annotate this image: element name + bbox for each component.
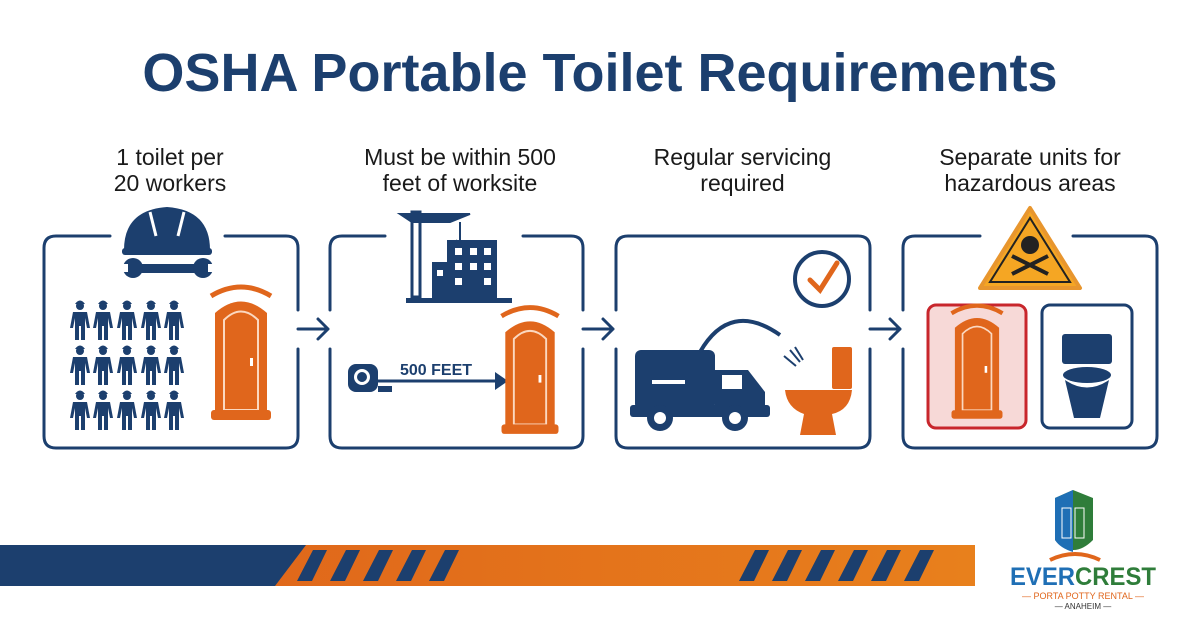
logo (1010, 490, 1156, 611)
icon: porta potty 2 (502, 308, 558, 434)
icon: porta potty 1 (211, 287, 271, 420)
icon: blue-boxed toilet (1042, 305, 1132, 428)
title: OSHA Portable Toilet Requirements (142, 43, 1058, 103)
icon: hard hat and wrench (118, 207, 218, 278)
icon: crane and building (400, 212, 512, 303)
footer stripe bar (0, 545, 975, 586)
label: panel 3: required (700, 170, 785, 196)
logo: — PORTA POTTY RENTAL — (1022, 591, 1144, 601)
arrow 1 (298, 319, 328, 339)
label: panel 1 (114, 144, 226, 196)
icon: hazard triangle (980, 208, 1080, 288)
label: panel 1: 20 workers (114, 170, 226, 196)
label: panel 2: Must be within 500 (364, 144, 556, 170)
icon: tape measure with 500 FEET: 500 FEET (400, 362, 472, 379)
label: panel 1: 1 toilet per (116, 144, 224, 170)
label: panel 2: feet of worksite (383, 170, 537, 196)
icon: red-boxed porta potty (928, 305, 1026, 428)
label: panel 4: hazardous areas (944, 170, 1116, 196)
panel 4 border (903, 236, 1157, 448)
label: panel 3: Regular servicing (654, 144, 831, 170)
icon: service truck (630, 321, 780, 431)
label: panel 2 (364, 144, 556, 196)
panel 3 border (616, 236, 870, 448)
arrow 3 (870, 319, 900, 339)
logo: EVERCREST (1010, 563, 1156, 591)
icon: workers grid (70, 300, 184, 430)
label: panel 3 (654, 144, 831, 196)
logo: — ANAHEIM — (1055, 602, 1111, 611)
arrow 2 (583, 319, 613, 339)
panel 1 border (44, 236, 298, 448)
panel 2 border (330, 236, 583, 448)
label: panel 4 (939, 144, 1121, 196)
icon: clock check (795, 252, 849, 306)
icon: tape measure with 500 FEET (348, 362, 508, 392)
label: panel 4: Separate units for (939, 144, 1121, 170)
icon: orange toilet (784, 347, 852, 435)
